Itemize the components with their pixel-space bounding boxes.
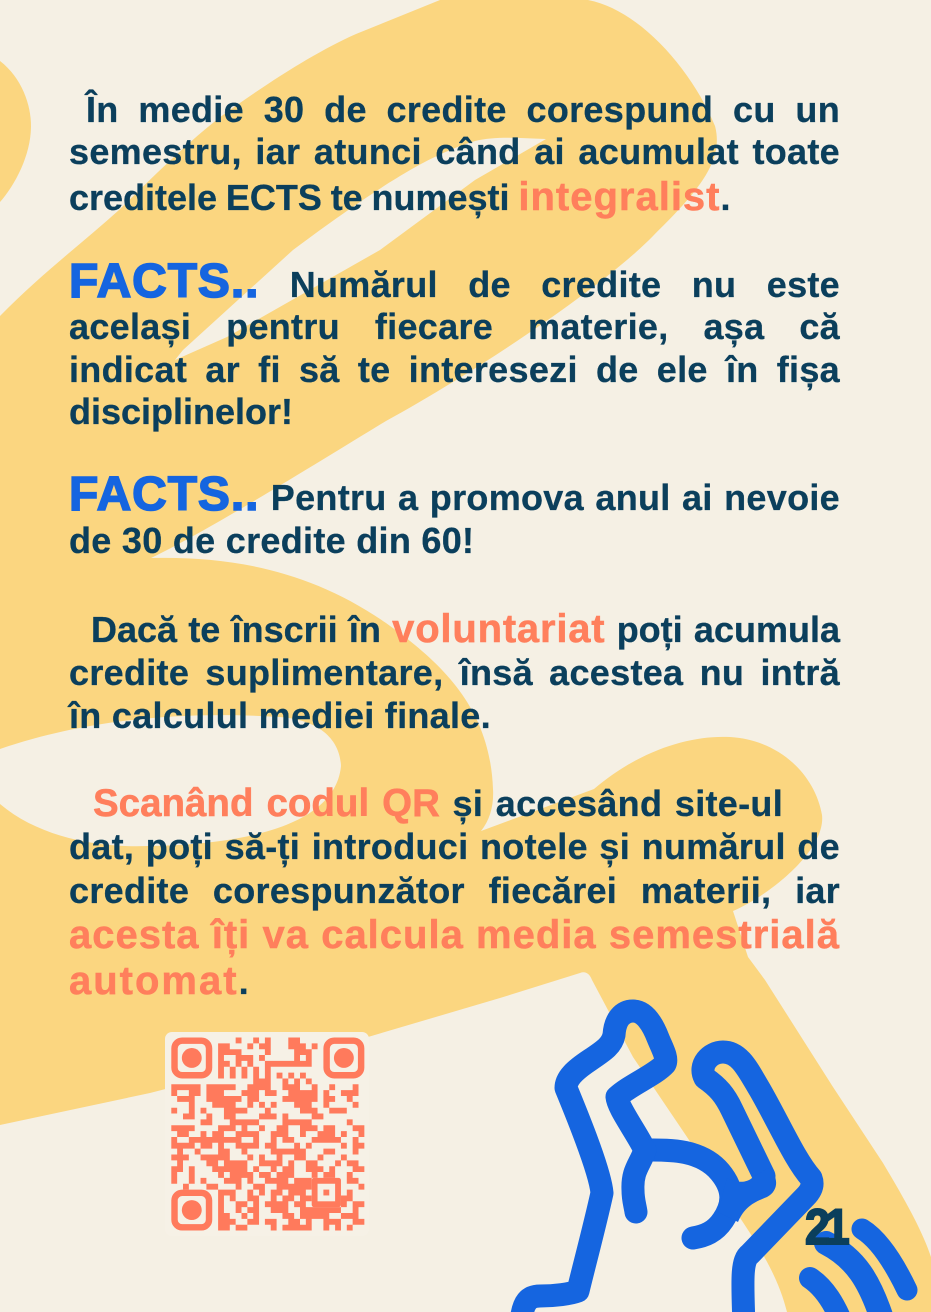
paragraph: QR code site instructions: dat, poți să-ți introduci notele și numărul de — [69, 826, 840, 867]
paragraph: volunteering: în calculul mediei finale. — [69, 695, 491, 736]
paragraph: facts about promoting the year: FACTS.. Pentru a promova anul ai nevoie — [69, 468, 840, 521]
paragraph: facts about credits per subject: FACTS.. Numărul de credite nu este — [69, 255, 840, 308]
decorative blue line figure — [510, 1000, 918, 1312]
paragraph: volunteering: Dacă te înscrii în voluntariat poți acumula — [91, 607, 840, 651]
paragraph: volunteering: credite suplimentare, însă acestea nu intră — [69, 652, 840, 693]
paragraph: QR code site instructions: Scanând codul QR și accesând site-ul — [93, 782, 783, 825]
paragraph: QR code site instructions: credite corespunzător fiecărei materii, iar — [69, 870, 840, 911]
paragraph: semester credits: În medie 30 de credite corespund cu un — [86, 89, 840, 130]
paragraph: facts about credits per subject: indicat ar fi să te interesezi de ele în fișa — [69, 349, 840, 390]
paragraph: QR code site instructions — [69, 782, 840, 1003]
paragraph: semester credits: semestru, iar atunci când ai acumulat toate — [69, 131, 840, 172]
paragraph: facts about promoting the year — [69, 468, 840, 561]
hub joint of the figure — [718, 1168, 776, 1222]
paragraph: volunteering — [67, 607, 840, 736]
paragraph: QR code site instructions: automat. — [69, 959, 249, 1003]
paragraph: facts about promoting the year: de 30 de credite din 60! — [69, 520, 474, 561]
paragraph: QR code site instructions: acesta îți va calcula media semestrială — [69, 913, 840, 957]
paragraph: facts about credits per subject: disciplinelor! — [69, 391, 293, 432]
paragraph: facts about credits per subject — [69, 255, 840, 432]
paragraph: semester credits — [69, 89, 840, 219]
paragraph: facts about credits per subject: același pentru fiecare materie, așa că — [69, 306, 840, 347]
page number: 21 — [805, 1199, 844, 1255]
paragraph: semester credits: creditele ECTS te numești integralist. — [69, 175, 731, 219]
QR code — [165, 1032, 369, 1230]
